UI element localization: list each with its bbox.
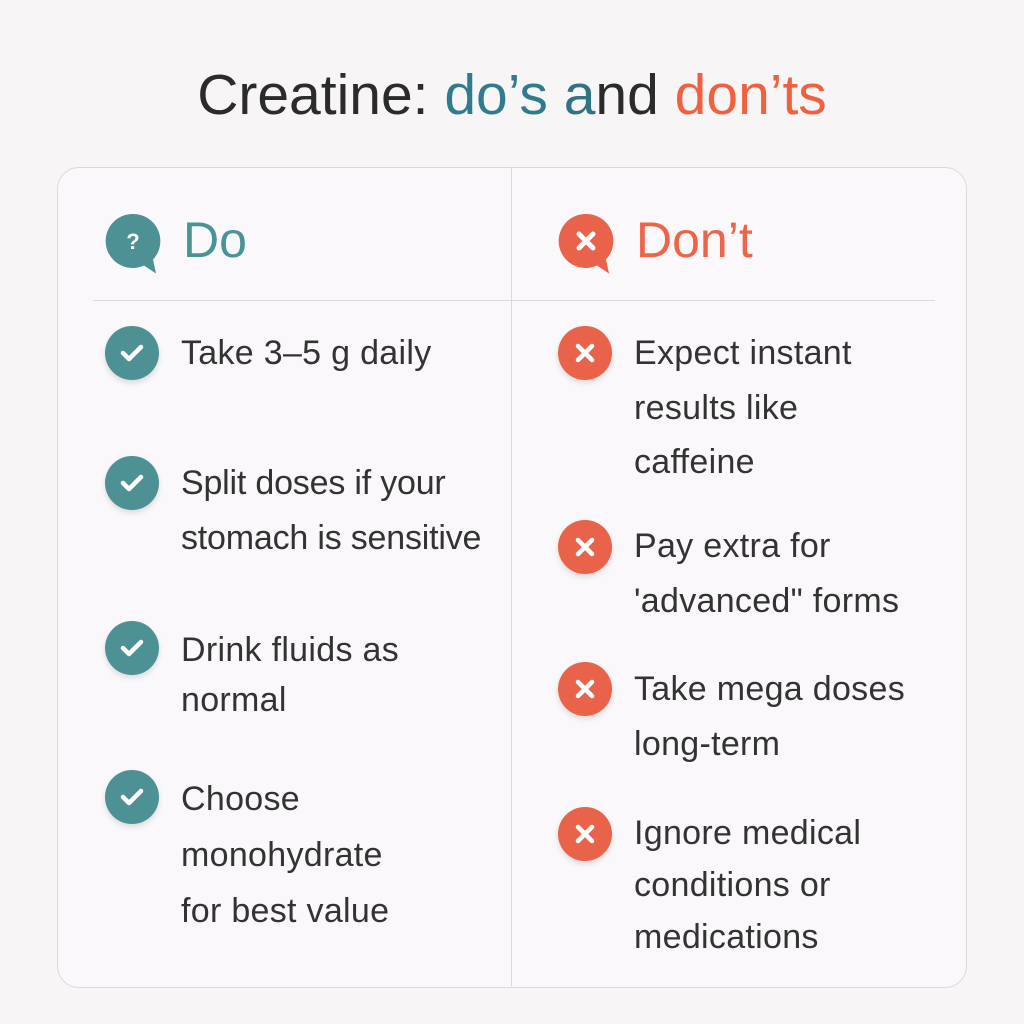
text: dont 3: Take mega doses — [634, 670, 905, 708]
icon: x 3 — [558, 662, 612, 716]
text: do 1: Take 3–5 g daily — [181, 334, 432, 372]
text: dont 3: long-term — [634, 725, 780, 763]
icon: x 4 — [558, 807, 612, 861]
icon: x 2 — [558, 520, 612, 574]
panel: do — [106, 212, 247, 274]
icon: question bubble — [106, 214, 160, 274]
text: dont 1 — [634, 334, 852, 481]
text: dont 4: Ignore medical — [634, 814, 861, 852]
text: dont 4 — [634, 814, 861, 956]
text: dont 4: conditions or — [634, 866, 831, 904]
icon: check 2 — [105, 456, 159, 510]
text: dont 3 — [634, 670, 905, 763]
icon: x bubble — [558, 214, 614, 274]
panel: dont — [558, 212, 753, 274]
text: do 4: Choose — [181, 780, 300, 818]
icon: question bubble: ? — [126, 229, 140, 254]
text: dont 4: medications — [634, 918, 819, 956]
text: do 3: normal — [181, 681, 287, 719]
heading: Don't: Don’t — [636, 212, 753, 268]
heading: Do: Do — [183, 212, 247, 268]
icon: check 3 — [105, 621, 159, 675]
icon: x 1 — [558, 326, 612, 380]
icon: check 1 — [105, 326, 159, 380]
icon: check 4 — [105, 770, 159, 824]
text: do 4 — [181, 780, 389, 930]
text: do 3 — [181, 631, 399, 719]
text: dont 2 — [634, 527, 899, 620]
text: dont 1: caffeine — [634, 443, 755, 481]
text: dont 1: results like — [634, 388, 798, 426]
do items — [104, 326, 481, 930]
dont items — [556, 326, 905, 956]
text: dont 1: Expect instant — [634, 334, 852, 372]
text: dont 2: 'advanced" forms — [634, 582, 899, 620]
card — [57, 167, 967, 988]
text: do 2 — [181, 464, 481, 557]
text: do 3: Drink fluids as — [181, 631, 399, 669]
text: dont 2: Pay extra for — [634, 527, 831, 565]
text: do 4: monohydrate — [181, 836, 383, 874]
title: Creatine: do’s and don’ts — [197, 63, 827, 127]
text: do 2: stomach is sensitive — [181, 519, 481, 557]
text: do 4: for best value — [181, 892, 389, 930]
text: do 2: Split doses if your — [181, 464, 446, 502]
